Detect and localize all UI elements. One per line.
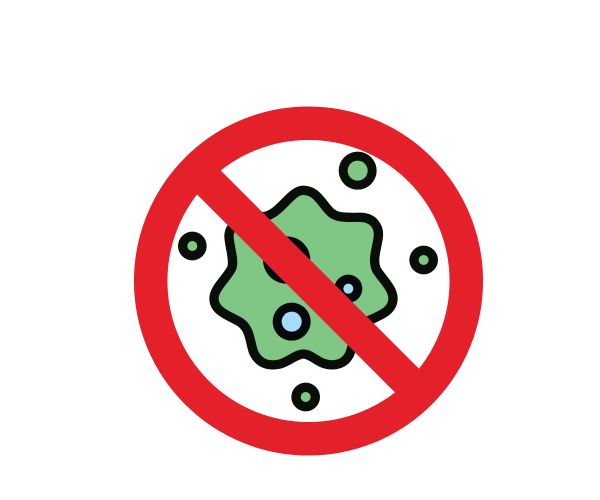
floating spore: left: [178, 232, 207, 260]
floating spore: top right: [339, 152, 377, 190]
germ body: [214, 190, 393, 365]
prohibition slash: [190, 163, 428, 401]
small germ cell: [334, 275, 362, 303]
icon: no germs: [151, 123, 466, 439]
floating spore: bottom: [291, 383, 320, 411]
large germ cell: [273, 303, 311, 341]
germ nucleus: [263, 236, 310, 284]
germ illustration: [178, 152, 438, 411]
floating spore: right: [409, 246, 438, 274]
prohibition ring: [151, 123, 466, 439]
